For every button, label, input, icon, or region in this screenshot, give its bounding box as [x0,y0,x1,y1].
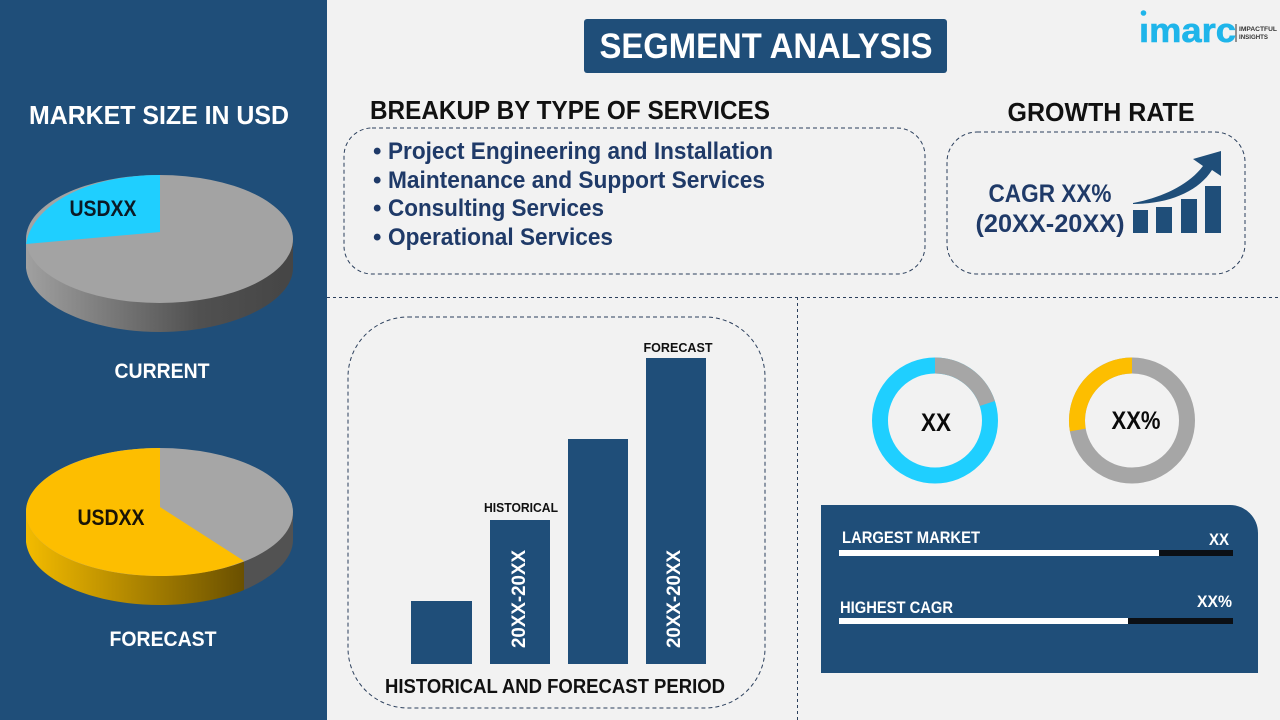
heading: breakup by type of services: BREAKUP BY TYPE OF SERVICES [370,95,770,125]
panel: services list: • [373,138,381,165]
label: historical years: 20XX-20XX [509,550,530,648]
title: SEGMENT ANALYSIS [600,27,932,66]
text: CAGR: CAGR XX% [988,180,1112,208]
pie chart: forecast: USDXX [78,505,145,530]
stat: largest market [839,528,1233,556]
panel: market size [0,0,327,720]
panel: services list: Operational Services [388,224,613,251]
panel: growth rate [947,132,1245,274]
panel: services list: • [373,167,381,194]
text: CAGR: (20XX-20XX) [976,210,1124,238]
logo: imarc [1138,10,1277,50]
stat: largest market: LARGEST MARKET [842,528,981,547]
label: forecast: FORECAST [110,628,217,651]
icon: growth chart with arrow [1133,151,1221,233]
pie chart: current [26,175,293,332]
panel: services list: • [373,224,381,251]
panel: services list: Project Engineering and Installation [388,138,773,165]
heading: market size in USD: MARKET SIZE IN USD [29,100,289,130]
pie chart: forecast [26,448,293,605]
donut: XX%: XX% [1112,407,1160,435]
caption: HISTORICAL AND FORECAST PERIOD [385,676,725,698]
label: forecast bar: FORECAST [644,340,713,355]
stat: highest CAGR [839,592,1233,624]
panel: services list: Consulting Services [388,195,604,222]
panel: bar chart [348,317,765,708]
stat: highest CAGR: HIGHEST CAGR [840,598,953,617]
title [584,19,947,73]
logo: imarc: IMPACTFUL [1239,26,1277,33]
label: forecast years: 20XX-20XX [664,550,685,648]
label: historical: HISTORICAL [484,500,558,515]
panel: market stats [821,505,1258,673]
pie chart: current: USDXX [70,196,137,221]
panel: services list [344,128,925,274]
text: CAGR [976,180,1124,238]
label: current: CURRENT [114,360,210,383]
panel: services list: • [373,195,381,222]
logo: imarc: imarc [1139,12,1236,50]
heading: growth rate: GROWTH RATE [1008,97,1194,127]
stat: highest CAGR: XX% [1197,592,1232,611]
bars [411,358,706,664]
donut: XX [880,366,990,476]
donut: XX% [1077,366,1187,476]
logo: imarc: INSIGHTS [1239,34,1269,41]
donut: XX: XX [921,409,951,437]
panel: services list: Maintenance and Support Services [388,167,765,194]
stat: largest market: XX [1209,530,1230,549]
